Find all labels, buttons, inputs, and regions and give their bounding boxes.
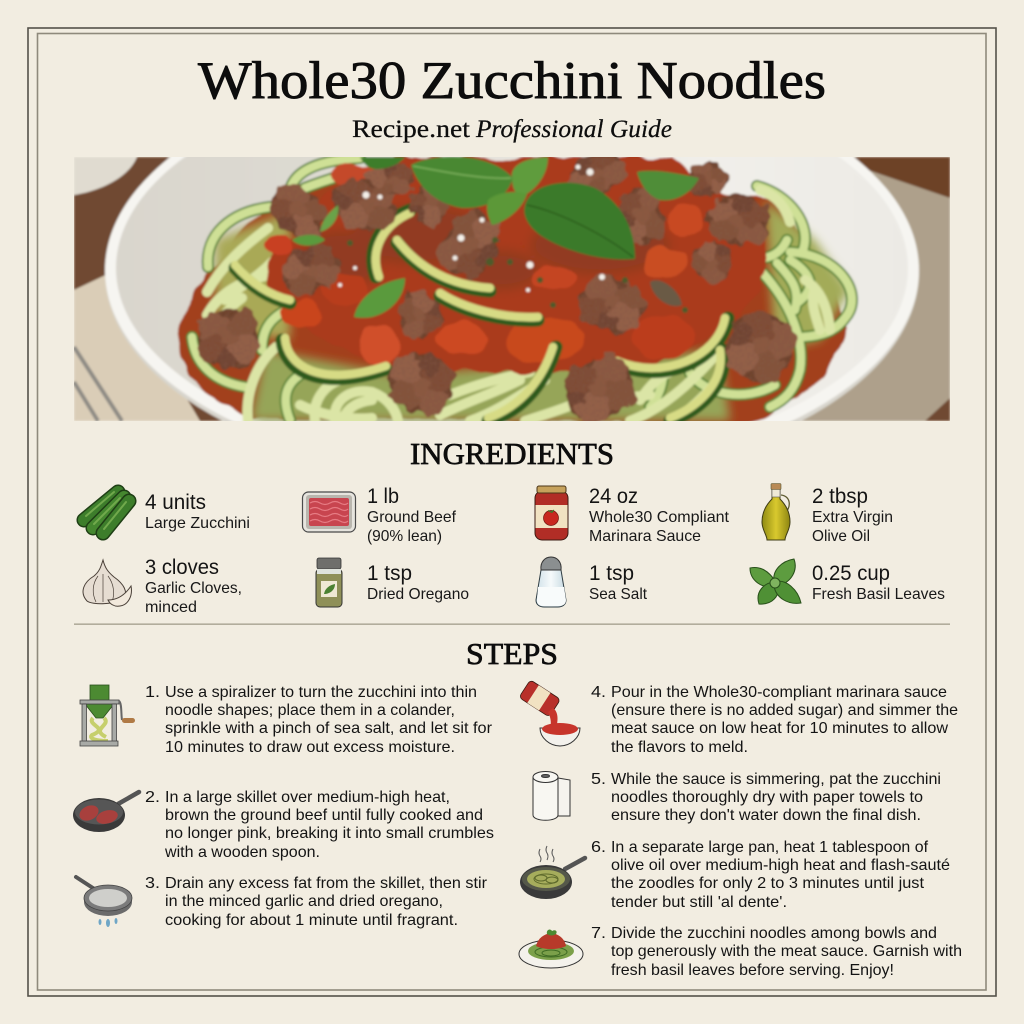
step 7: top generously with the meat sauce. Garnish with (611, 943, 962, 960)
ingredient: marinara sauce: 24 oz (589, 485, 638, 508)
icon: pouring sauce into bowl (519, 680, 580, 746)
step 6: tender but still 'al dente'. (611, 894, 787, 911)
step 1: noodle shapes; place them in a colander, (165, 702, 455, 719)
ingredients heading: INGREDIENTS (410, 436, 614, 471)
step 5 (533, 771, 941, 824)
ingredient: garlic (83, 556, 242, 616)
icon: pan with zoodles (520, 846, 585, 899)
ingredient: garlic: minced (145, 599, 197, 616)
step 7 (519, 925, 962, 979)
step 1: 1. (145, 684, 160, 701)
ingredient: olive oil (762, 484, 893, 545)
step 5: ensure they don't water down the final dish. (611, 807, 921, 824)
ingredient: garlic: Garlic Cloves, (145, 580, 242, 597)
sauce pool under noodles (180, 157, 850, 425)
ingredient: basil: Fresh Basil Leaves (812, 586, 945, 603)
subtitle: Recipe.net (352, 116, 470, 143)
step 3: in the minced garlic and dried oregano, (165, 893, 443, 910)
ingredient: oregano: Dried Oregano (367, 586, 469, 603)
step 1 (80, 684, 493, 756)
hero photo: zucchini noodles with meat sauce in a white bowl (74, 157, 950, 421)
icon: skillet with beef (73, 792, 139, 832)
zucchini slices (235, 210, 728, 421)
salt flakes and herbs (338, 164, 605, 292)
ingredient: sea salt: Sea Salt (589, 586, 648, 603)
step 5: While the sauce is simmering, pat the zucchini (611, 771, 941, 788)
step 3: cooking for about 1 minute until fragrant. (165, 912, 458, 929)
step 1: Use a spiralizer to turn the zucchini into thin (165, 684, 477, 701)
ingredient: ground beef: (90% lean) (367, 528, 442, 545)
ingredient: zucchini: Large Zucchini (145, 515, 250, 532)
small side bowl (74, 157, 137, 195)
icon: marinara jar (535, 486, 568, 540)
step 6: the zoodles for only 2 to 3 minutes until just (611, 875, 925, 892)
steps heading: STEPS (466, 636, 558, 671)
step 2: In a large skillet over medium-high heat, (165, 789, 450, 806)
fork (74, 347, 122, 421)
step 4 (519, 680, 958, 756)
ingredient: basil: 0.25 cup (812, 562, 890, 585)
step 4: (ensure there is no added sugar) and simmer the (611, 702, 958, 719)
step 2: brown the ground beef until fully cooked and (165, 807, 483, 824)
step 2: 2. (145, 789, 160, 806)
step 6: olive oil over medium-high heat and flash-sauté (611, 857, 950, 874)
subtitle: Professional Guide (475, 116, 672, 143)
wooden table background (74, 157, 950, 421)
step 3: Drain any excess fat from the skillet, then stir (165, 875, 488, 892)
step 1: sprinkle with a pinch of sea salt, and let sit for (165, 720, 493, 737)
tomato chunks (266, 163, 703, 362)
darker sauce shading (300, 205, 670, 290)
step 6: 6. (591, 839, 606, 856)
ground beef crumbles (196, 157, 799, 421)
pale noodle underlayer at the bottom of the bowl (215, 200, 850, 421)
step 6 (520, 839, 950, 911)
step 4: 4. (591, 684, 606, 701)
ingredient: basil (750, 559, 945, 604)
right napkin (802, 170, 950, 421)
ingredient: ground beef (302, 485, 457, 545)
step 7: 7. (591, 925, 606, 942)
ingredient: marinara sauce (535, 485, 730, 545)
step 2: no longer pink, breaking it into small crumbles (165, 825, 494, 842)
main sauce mass (266, 157, 768, 372)
ingredient: ground beef: 1 lb (367, 485, 399, 508)
ingredient: olive oil: Olive Oil (812, 528, 870, 545)
icon: olive oil bottle (762, 484, 790, 540)
step 2 (73, 789, 494, 861)
left napkin (74, 272, 200, 421)
step 4: the flavors to meld. (611, 739, 748, 756)
step 7: Divide the zucchini noodles among bowls and (611, 925, 937, 942)
step 7: fresh basil leaves before serving. Enjoy! (611, 962, 894, 979)
ingredient: garlic: 3 cloves (145, 556, 219, 579)
step 5: 5. (591, 771, 606, 788)
title: Whole30 Zucchini Noodles (198, 52, 826, 110)
step 2: with a wooden spoon. (164, 844, 320, 861)
ingredient: olive oil: 2 tbsp (812, 485, 868, 508)
icon: basil leaves (750, 559, 801, 604)
icon: colander draining (76, 877, 132, 927)
subtitle (352, 116, 672, 143)
icon: zucchini (84, 492, 129, 533)
back noodles (192, 158, 852, 421)
step 3: 3. (145, 875, 160, 892)
ingredient: marinara sauce: Marinara Sauce (589, 528, 701, 545)
icon: paper towel roll (533, 772, 570, 820)
step 4: meat sauce on low heat for 10 minutes to allow (611, 720, 948, 737)
step 1: 10 minutes to draw out excess moisture. (165, 739, 455, 756)
icon: garlic bulb (83, 560, 131, 606)
icon: plated zoodles (519, 930, 583, 968)
step 3 (76, 875, 488, 929)
ingredient: oregano (316, 558, 469, 607)
ingredient: zucchini (84, 491, 250, 533)
icon: spiralizer (80, 685, 135, 746)
icon: meat tray (302, 492, 356, 532)
ingredient: marinara sauce: Whole30 Compliant (589, 509, 730, 526)
ingredient: ground beef: Ground Beef (367, 509, 457, 526)
step 5: noodles thoroughly dry with paper towels to (611, 789, 923, 806)
step 6: In a separate large pan, heat 1 tablespoon of (611, 839, 929, 856)
icon: salt shaker (536, 557, 566, 607)
icon: oregano jar (316, 558, 342, 607)
ingredient: oregano: 1 tsp (367, 562, 412, 585)
step 4: Pour in the Whole30-compliant marinara sauce (611, 684, 947, 701)
basil leaves garnish (292, 156, 699, 318)
white bowl (102, 157, 920, 421)
ingredient: olive oil: Extra Virgin (812, 509, 893, 526)
ingredient: sea salt: 1 tsp (589, 562, 634, 585)
ingredient: zucchini: 4 units (145, 491, 206, 514)
ingredient: sea salt (536, 557, 648, 607)
